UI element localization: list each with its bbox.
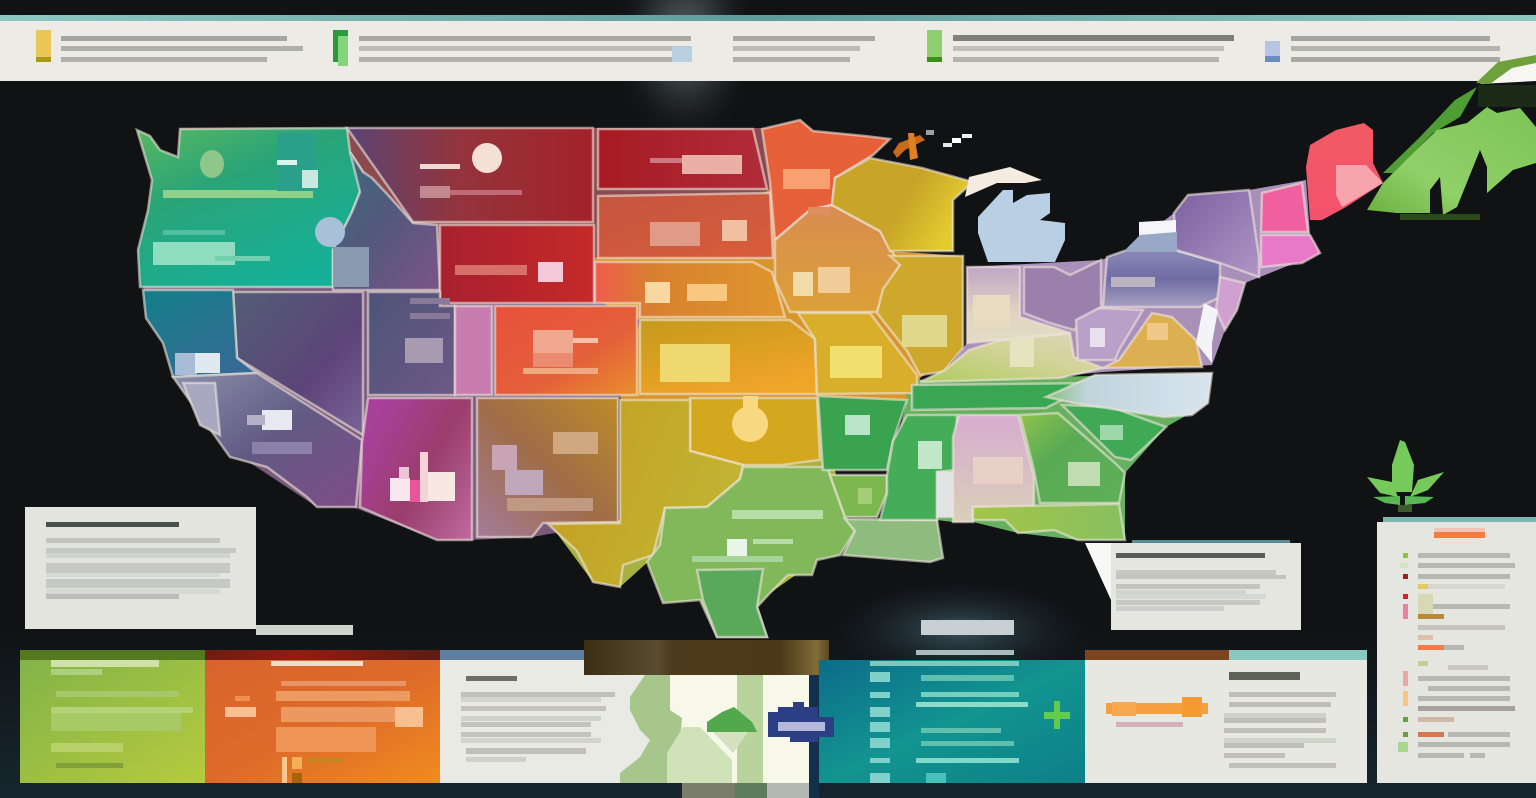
Utah label [405,298,450,363]
white panel text [461,692,615,762]
Kansas [640,320,817,394]
Oklahoma icon [732,396,768,442]
Idaho column [333,247,369,287]
left note heading [46,522,179,527]
South Carolina [1062,405,1166,460]
brown banner [584,640,829,675]
Cascade icon [277,160,318,188]
footer illustration base [682,783,809,798]
Indiana [967,267,1070,343]
Oregon label [153,230,270,265]
Utah [368,292,455,395]
teal panel heading [916,620,1014,655]
Wisconsin [832,158,973,251]
teal list row chips [870,672,890,783]
Virginia icon [1147,323,1168,340]
header item 4 [927,30,1234,62]
Idaho circle [315,217,345,247]
panel: right legend [1377,517,1536,783]
left section label [256,625,353,635]
Arkansas icon [845,415,870,435]
header strip [0,15,1536,81]
California icon [175,353,220,375]
callout: right note [1085,540,1301,630]
legend bullets [1398,553,1408,752]
Washington label [163,190,313,198]
Montana [347,128,593,222]
header item 3 [733,36,875,62]
right note heading [1116,553,1265,558]
panel: orange [205,650,440,783]
Cascade column [277,133,315,191]
panel: white text and plant illustration [440,650,809,783]
West Virginia icon [1090,328,1105,347]
orange panel text [276,681,410,752]
Colorado icon [523,330,598,374]
white coast patch [937,472,953,517]
New Mexico [477,398,618,537]
decorative palm leaf top right [1367,55,1536,220]
Southern California icon [247,410,312,454]
Texas west [548,400,743,587]
Tennessee [912,383,1095,410]
Iowa [775,205,900,312]
West Virginia [1076,308,1143,360]
Illinois [877,256,963,375]
Idaho [333,152,440,290]
teal list row text [916,675,1028,783]
header item 2 [333,30,692,66]
left note body text [46,538,236,599]
New Mexico icon [492,432,598,511]
navy column beside teal panel [809,675,819,798]
Maine [1306,123,1383,220]
Washington icon [200,150,224,178]
Vermont [1261,183,1308,232]
Georgia [1020,413,1125,503]
Missouri icon [830,346,882,378]
Texas east [647,467,855,637]
Great Lakes shore [1125,232,1177,252]
Oklahoma [690,398,820,465]
Nebraska [595,262,785,317]
header item 5 [1265,36,1500,62]
southern California [173,373,362,507]
Missouri [798,313,917,394]
Alabama label [973,457,1023,484]
South Dakota [598,193,773,258]
lake patch [1139,220,1176,236]
New York [1174,190,1259,277]
Nebraska icon [645,282,727,303]
northern California [143,290,257,377]
Virginia [1103,313,1202,368]
small green leaf icon [1367,440,1444,512]
pink column [455,306,492,395]
Pennsylvania label [1111,277,1155,287]
Ohio [1024,260,1101,330]
Mississippi [880,415,957,520]
plant illustration [620,675,809,783]
Texas label [692,510,823,562]
Michigan [978,190,1065,262]
orange logotype [1106,697,1208,717]
legend rows [1418,553,1515,758]
Alabama [953,415,1034,522]
Minnesota [762,120,890,240]
Illinois icon [902,315,947,347]
Wyoming icon [538,262,563,282]
green panel heading [51,660,159,675]
orange panel icons [225,696,423,727]
Georgia icon [1068,462,1100,486]
North Carolina [1046,373,1212,417]
white coast Delaware [1196,303,1218,363]
blue label [768,702,834,742]
green plus icon [1044,701,1070,729]
Kansas label [660,344,730,382]
Kentucky icon [1010,338,1034,367]
Louisiana [830,475,887,517]
Maine highlight [1336,165,1383,207]
panel: orange and teal card [1085,650,1367,783]
Arizona [360,398,472,540]
callout: left note [25,507,256,629]
map silhouette underlay [140,128,1320,600]
legend heading [1434,528,1485,538]
Kentucky [920,333,1103,382]
orange panel heading [271,661,363,666]
California coast panel [183,383,220,435]
Mississippi icon [918,441,942,469]
Iowa icon [793,267,850,296]
Arkansas [818,396,907,470]
orange panel footer icon [282,757,343,783]
Gulf coast cluster [843,519,943,562]
Florida panhandle [973,504,1125,540]
Montana label [420,164,522,198]
Pennsylvania [1103,250,1220,307]
north shore marks [893,130,972,160]
North Dakota [598,129,767,189]
Montana icon [472,143,502,173]
Colorado [495,306,637,395]
North Dakota icon [650,155,742,174]
Texas south tip [697,569,767,637]
Indiana icon [973,295,1010,327]
Wyoming label [455,265,527,275]
Louisiana icon [858,488,872,504]
Pacific northwest states [137,128,363,287]
Wyoming [440,225,594,303]
Maryland [1216,277,1245,330]
white panel heading [466,676,517,681]
card text [1224,692,1336,768]
panel: green [20,650,205,783]
panel: teal list [819,660,1085,783]
map icons and labels [153,133,1168,637]
US map [137,120,1383,637]
Upper peninsula [965,167,1042,197]
right note body text [1116,570,1286,611]
green panel text [51,691,193,768]
South Carolina icon [1100,425,1123,440]
Minnesota label [783,169,830,215]
pink caption [1116,722,1183,727]
Arizona factory icon [390,452,455,502]
Connecticut [1261,235,1320,267]
South Dakota icon [650,220,747,246]
header item 1 [36,30,303,62]
Nevada [233,292,363,435]
card heading [1229,672,1300,680]
